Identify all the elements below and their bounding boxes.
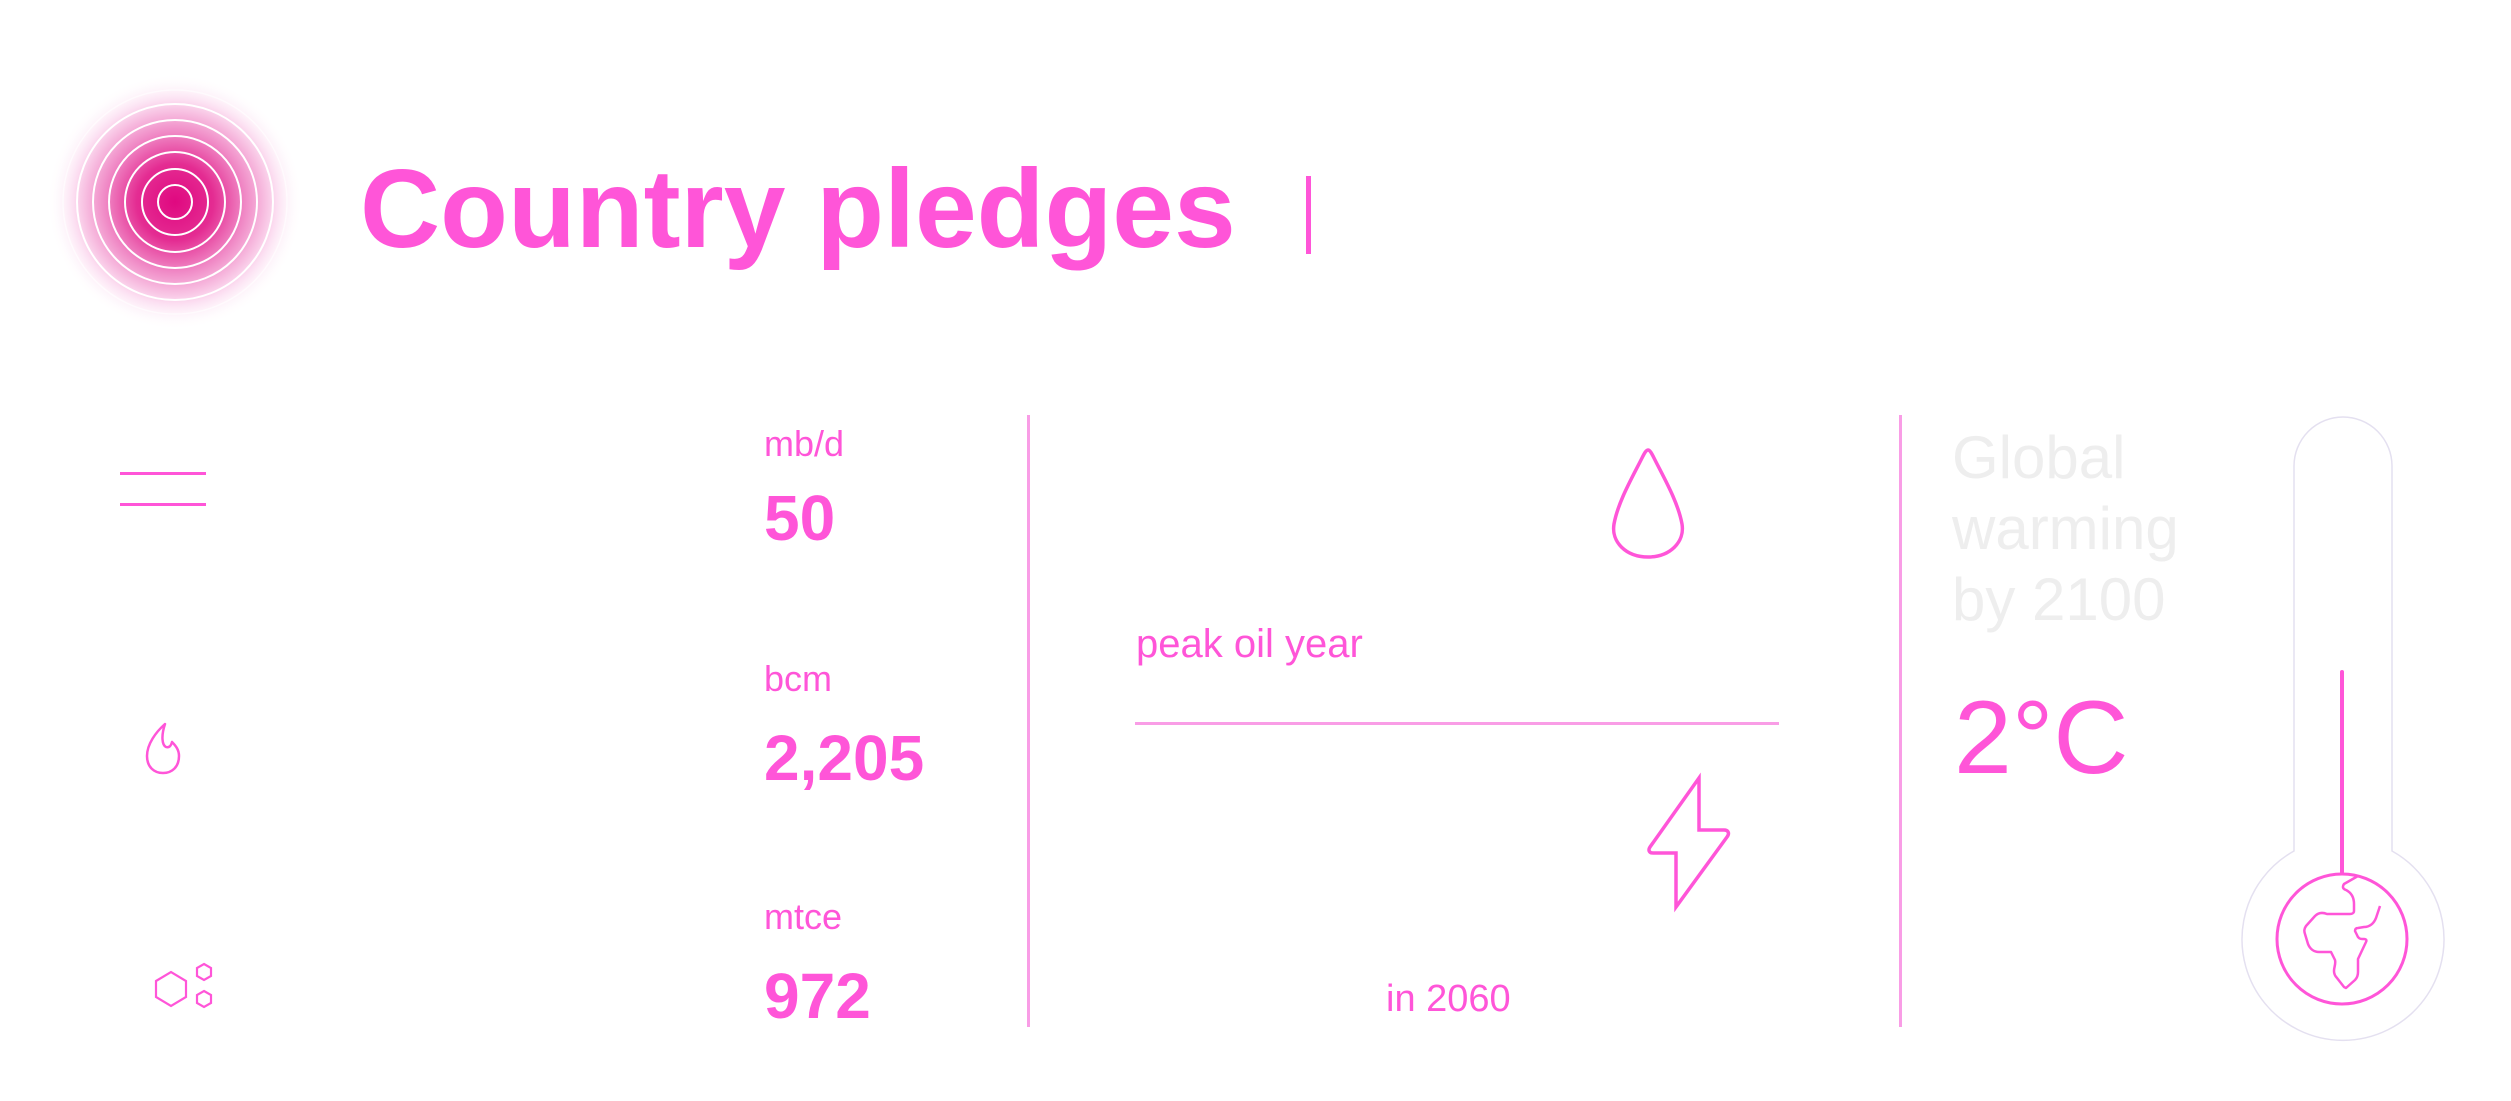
text: in 2060: in 2060 [1386, 978, 1511, 1020]
icon: thermometer with globe [2241, 416, 2445, 1041]
divider horizontal [1135, 722, 1779, 725]
text: oil label: mb/d [764, 423, 844, 464]
icon: hexagons [154, 962, 212, 1008]
number: coal: 972 [764, 960, 871, 1032]
icon: flame [146, 722, 180, 774]
number: gas: 2,205 [764, 722, 924, 794]
number: oil: 50 [764, 482, 835, 554]
divider right [1899, 415, 1902, 1027]
number: 2°C: 2°C [1954, 680, 2129, 796]
text: global warming by 2100: warming [1952, 495, 2179, 562]
text: global warming by 2100: by 2100 [1952, 566, 2166, 633]
icon: oil lines [120, 472, 206, 506]
text: global warming by 2100 [1952, 424, 2179, 633]
text: peak oil year: peak oil year [1136, 622, 1363, 666]
text: gas label: bcm [764, 658, 832, 699]
icon: drop [1612, 448, 1684, 559]
title: Country pledges [360, 147, 1236, 271]
icon: concentric glowing circle [60, 87, 290, 317]
divider left [1027, 415, 1030, 1027]
text: global warming by 2100: Global [1952, 424, 2125, 491]
icon: lightning bolt [1647, 772, 1730, 912]
cursor bar [1306, 176, 1311, 254]
text: coal label: mtce [764, 896, 842, 937]
